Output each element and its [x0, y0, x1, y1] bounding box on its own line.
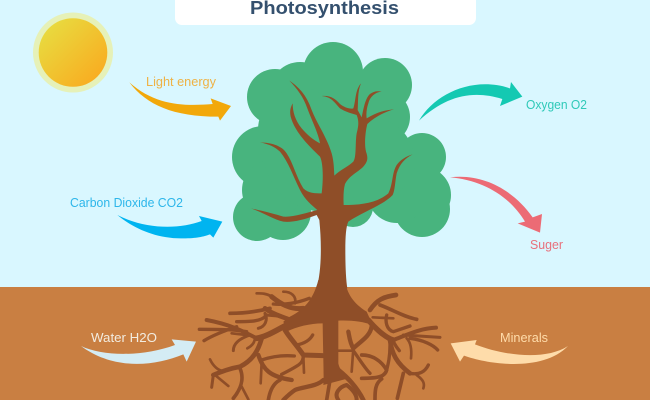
- label: light energy: Light energy: [146, 75, 217, 89]
- label: minerals: Minerals: [500, 331, 548, 345]
- label: carbon dioxide: Carbon Dioxide CO2: [70, 196, 183, 210]
- tree canopy: [232, 42, 451, 241]
- label: water: Water H2O: [91, 331, 157, 345]
- soil: [0, 287, 650, 400]
- arrow: sugar: [450, 177, 542, 233]
- arrow: water: [81, 339, 196, 364]
- title banner: [175, 0, 476, 25]
- arrow: light energy: [129, 82, 231, 121]
- sky background: [0, 0, 650, 287]
- arrow: minerals: [451, 340, 568, 364]
- arrow: carbon dioxide: [117, 215, 222, 238]
- icon: sun: [33, 12, 113, 92]
- label: oxygen: Oxygen O2: [526, 98, 587, 112]
- label: sugar: Suger: [530, 238, 563, 252]
- arrow: oxygen: [419, 82, 522, 121]
- tree roots: [199, 280, 440, 400]
- tree trunk and branches: [251, 81, 413, 288]
